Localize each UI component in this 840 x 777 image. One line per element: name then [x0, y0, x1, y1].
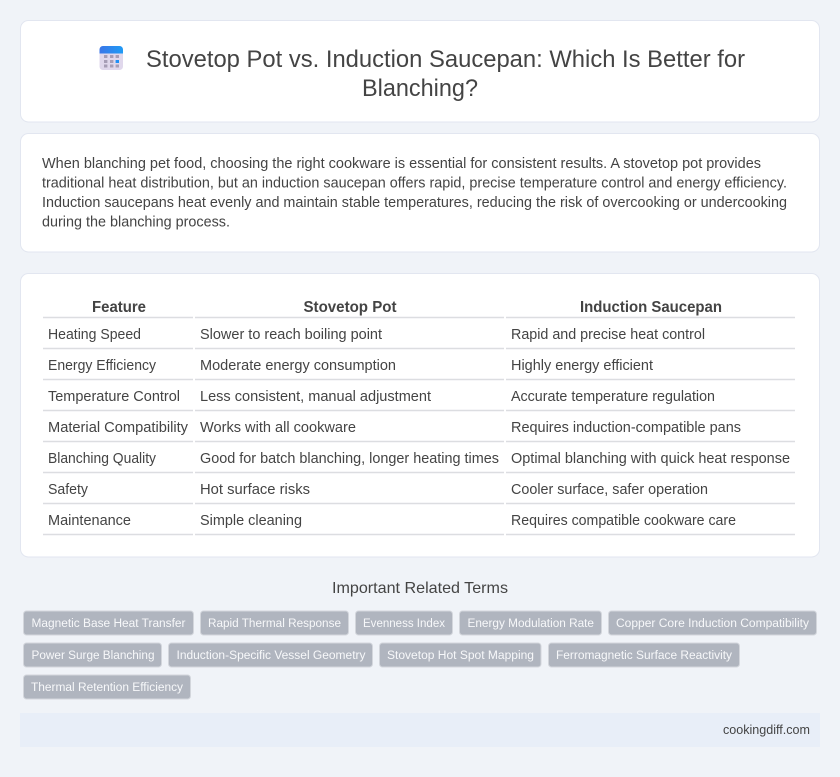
row: safety: Hot surface risks [200, 482, 310, 498]
table header: Induction Saucepan [580, 299, 722, 316]
tag [24, 675, 190, 699]
row: material compatibility: Material Compatibility [48, 420, 189, 436]
tag: Stovetop Hot Spot Mapping [387, 648, 534, 662]
row: energy efficiency: Highly energy efficient [511, 358, 653, 374]
text block: intro paragraph: When blanching pet food, choosing the right cookware is essential for consistent results. A stovetop pot provides [42, 156, 761, 172]
tag [168, 643, 372, 667]
footer credit: cookingdiff.com [723, 722, 810, 737]
tag: Ferromagnetic Surface Reactivity [556, 648, 733, 662]
row: energy efficiency: Energy Efficiency [48, 358, 157, 374]
footer [20, 713, 820, 747]
row: maintenance: Maintenance [48, 513, 131, 529]
row: blanching quality: Good for batch blanching, longer heating times [200, 451, 499, 467]
table header: Feature [92, 299, 146, 316]
tag: Copper Core Induction Compatibility [616, 616, 810, 630]
tag [356, 611, 452, 635]
row: heating speed: Rapid and precise heat control [511, 327, 705, 343]
tag: Thermal Retention Efficiency [31, 680, 184, 694]
row: maintenance: Requires compatible cookware care [511, 513, 736, 529]
tag: Power Surge Blanching [32, 648, 154, 662]
panel: related term tags [24, 611, 816, 699]
tag: Induction-Specific Vessel Geometry [176, 648, 366, 662]
row: blanching quality: Optimal blanching with quick heat response [511, 451, 790, 467]
row: material compatibility [48, 420, 741, 436]
tag [24, 611, 194, 635]
table header: Stovetop Pot [304, 299, 397, 316]
row: energy efficiency: Moderate energy consumption [200, 358, 396, 374]
tag [24, 643, 162, 667]
heading: important related terms: Important Related Terms [332, 580, 508, 597]
row: temperature control: Less consistent, manual adjustment [200, 389, 431, 405]
row: heating speed: Heating Speed [48, 327, 141, 343]
row: blanching quality [48, 451, 790, 467]
row: maintenance: Simple cleaning [200, 513, 302, 529]
tag: Magnetic Base Heat Transfer [32, 616, 186, 630]
text block: intro paragraph [42, 156, 787, 230]
row: temperature control: Temperature Control [48, 389, 180, 405]
panel: header [20, 20, 820, 122]
row: maintenance [48, 513, 736, 529]
row: heating speed [48, 327, 705, 343]
row: temperature control [48, 389, 715, 405]
title: Stovetop Pot vs. Induction Saucepan: Which Is Better for [146, 46, 745, 73]
panel: intro text [20, 134, 820, 252]
tag [548, 643, 740, 667]
tag [608, 611, 816, 635]
tag [460, 611, 602, 635]
panel: comparison table [20, 274, 820, 557]
tag [380, 643, 541, 667]
table header [92, 299, 722, 316]
title [146, 46, 745, 102]
tag: Evenness Index [363, 616, 445, 630]
row: temperature control: Accurate temperature regulation [511, 389, 715, 405]
text block: intro paragraph: during the blanching process. [42, 214, 230, 230]
row: heating speed: Slower to reach boiling point [200, 327, 382, 343]
row: safety: Safety [48, 482, 89, 498]
tag [200, 611, 348, 635]
icon: calendar [100, 46, 123, 70]
row: energy efficiency [48, 358, 653, 374]
tag: Energy Modulation Rate [468, 616, 594, 630]
text block: intro paragraph: Induction saucepans heat evenly and maintain stable temperatures, reducing the risk of overcooking or undercooking [42, 195, 787, 211]
row: material compatibility: Works with all cookware [200, 420, 356, 436]
tag: Rapid Thermal Response [208, 616, 341, 630]
row: blanching quality: Blanching Quality [48, 451, 157, 467]
row: material compatibility: Requires induction-compatible pans [511, 420, 741, 436]
title: Blanching? [362, 75, 478, 102]
text block: intro paragraph: traditional heat distribution, but an induction saucepan offers rapid, precise temperature control and energy efficiency. [42, 176, 787, 192]
row: safety: Cooler surface, safer operation [511, 482, 708, 498]
row: safety [48, 482, 708, 498]
